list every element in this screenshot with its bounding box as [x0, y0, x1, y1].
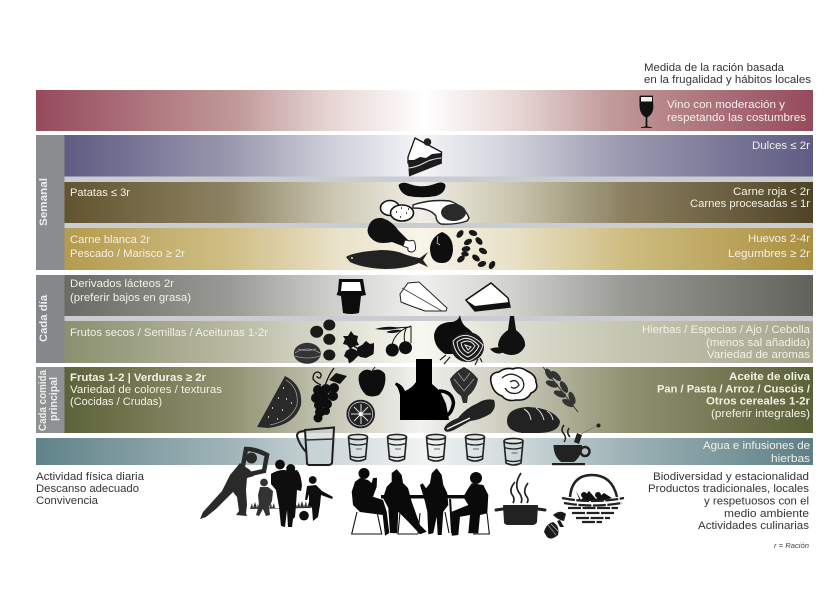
- tab: Cada comida principal: [36, 367, 64, 433]
- band: fruit, vegetables, oil, cereals: Aceite de oliva: [729, 371, 811, 383]
- text: sustainability: Actividades culinarias: [698, 520, 810, 532]
- text: lifestyle: [36, 471, 145, 507]
- chair 1: [352, 512, 382, 534]
- tab: Cada comida principal: Cada comida: [37, 369, 49, 431]
- panel: main meal: [36, 367, 813, 433]
- text: lifestyle: Convivencia: [36, 495, 99, 507]
- tab: Cada comida principal: principal: [48, 377, 60, 421]
- table: [381, 495, 465, 533]
- heading: portion measure note: en la frugalidad y hábitos locales: [644, 74, 812, 86]
- band: potatoes and red meat: Carne roja < 2r: [733, 186, 810, 198]
- icons: water glasses: [348, 434, 523, 465]
- band: water: [36, 438, 813, 465]
- band: white meat, fish, eggs, legumes: [64, 228, 813, 270]
- icon: onion: [434, 315, 484, 365]
- chairs 2 and 3: [398, 512, 449, 534]
- band: nuts, herbs: Frutos secos / Semillas / Aceitunas 1-2r: [70, 327, 268, 339]
- band: nuts, herbs: [64, 321, 813, 363]
- band: white meat, fish, eggs, legumes: Legumbres ≥ 2r: [728, 248, 810, 260]
- person 2: [383, 469, 427, 534]
- icon: soft cheese: [400, 282, 447, 311]
- band: white meat, fish, eggs, legumes: Pescado / Marisco ≥ 2r: [70, 248, 185, 260]
- icon: potatoes: [380, 200, 414, 221]
- icon: steak: [413, 200, 469, 224]
- icon: apple: [359, 367, 385, 396]
- icon: olives: [375, 326, 412, 356]
- icon: watermelon: [257, 376, 301, 428]
- band: fruit, vegetables, oil, cereals: Frutas 1-2 | Verduras ≥ 2r: [70, 372, 207, 384]
- band: nuts, herbs: (menos sal añadida): [706, 337, 810, 349]
- band: potatoes and red meat: Carnes procesadas ≤ 1r: [690, 198, 810, 210]
- person 1: [352, 468, 389, 536]
- illustration: person stretching: [200, 449, 267, 519]
- icon: artichoke: [450, 367, 478, 403]
- icon: basket: [562, 475, 624, 522]
- text: sustainability: medio ambiente: [724, 508, 809, 520]
- legend: r = ración: r = Ración: [774, 543, 809, 550]
- icon: water jug: [297, 428, 334, 465]
- band: white meat, fish, eggs, legumes: Carne blanca 2r: [70, 234, 150, 246]
- icon: parsley: [343, 331, 374, 364]
- chair 4: [473, 513, 489, 534]
- illustration: family playing: [250, 460, 333, 527]
- band: dairy: Derivados lácteos 2r: [70, 278, 174, 290]
- icon: grapes: [311, 368, 347, 422]
- band: wine: [36, 90, 813, 131]
- panel: daily: [36, 275, 813, 363]
- icon: fish: [346, 250, 428, 269]
- person 3: [420, 468, 448, 535]
- panel: weekly: [36, 135, 813, 270]
- illustration: family at table: [352, 468, 489, 536]
- tab: Semanal: Semanal: [38, 178, 50, 226]
- band: nuts, herbs: Variedad de aromas: [707, 349, 811, 361]
- icon: olive oil jug: [395, 359, 454, 420]
- text: sustainability: Biodiversidad y estacionalidad: [653, 471, 809, 483]
- person 4: [452, 472, 488, 536]
- band: fruit, vegetables, oil, cereals: Pan / Pasta / Arroz / Cuscús /: [657, 384, 810, 396]
- heading: portion measure note: Medida de la ración basada: [644, 62, 785, 74]
- band: fruit, vegetables, oil, cereals: (preferir integrales): [711, 408, 810, 420]
- heading: portion measure note: [644, 62, 812, 86]
- icon: sausage: [398, 183, 446, 197]
- band: water: hierbas: [771, 453, 811, 465]
- tab: Cada día: [36, 275, 64, 363]
- band: dairy: (preferir bajos en grasa): [70, 292, 191, 304]
- icon: hard cheese: [466, 283, 510, 311]
- band: fruit, vegetables, oil, cereals: [64, 367, 813, 433]
- icon: lettuce: [491, 368, 537, 400]
- band: nuts, herbs: Hierbas / Especias / Ajo / Cebolla: [642, 324, 811, 336]
- band: wine: respetando las costumbres: [667, 112, 807, 124]
- band: dairy: [64, 275, 813, 316]
- band: sweets: [64, 135, 813, 176]
- icon: tea cup: [552, 424, 600, 465]
- band: fruit, vegetables, oil, cereals: Otros cereales 1-2r: [706, 396, 811, 408]
- tab: Cada día: Cada día: [38, 294, 50, 342]
- icon: egg: [430, 232, 453, 263]
- icon: wheat: [543, 367, 578, 412]
- text: sustainability: y respetuosos con el: [704, 496, 809, 508]
- icon: wine glass: [640, 96, 653, 128]
- band: potatoes and red meat: Patatas ≤ 3r: [70, 187, 130, 199]
- text: lifestyle: Descanso adecuado: [36, 483, 139, 495]
- band: wine: Vino con moderación y: [667, 99, 786, 111]
- tab: Semanal: [36, 135, 64, 270]
- icon: mushrooms: [544, 512, 566, 539]
- icon: chicken leg: [368, 218, 416, 252]
- icon: orange slice: [346, 400, 375, 428]
- band: white meat, fish, eggs, legumes: Huevos 2-4r: [748, 233, 810, 245]
- band: water: Agua e infusiones de: [703, 440, 810, 452]
- band: fruit, vegetables, oil, cereals: (Cocidas / Crudas): [70, 396, 162, 408]
- icon: nuts: [294, 320, 335, 364]
- icon: beans: [455, 229, 497, 270]
- icon: steaming pot: [496, 473, 545, 525]
- text: lifestyle: Actividad física diaria: [36, 471, 145, 483]
- band: sweets: Dulces ≤ 2r: [752, 140, 810, 152]
- band: potatoes and red meat: [64, 182, 813, 223]
- icon: garlic: [490, 316, 525, 355]
- band: fruit, vegetables, oil, cereals: Variedad de colores / texturas: [70, 384, 223, 396]
- text: sustainability: Productos tradicionales, locales: [648, 483, 810, 495]
- icon: cake: [408, 138, 442, 176]
- icon: bread: [507, 407, 560, 433]
- text: sustainability: [648, 471, 810, 532]
- icon: chard leaf: [444, 399, 495, 432]
- icon: yogurt: [336, 279, 366, 314]
